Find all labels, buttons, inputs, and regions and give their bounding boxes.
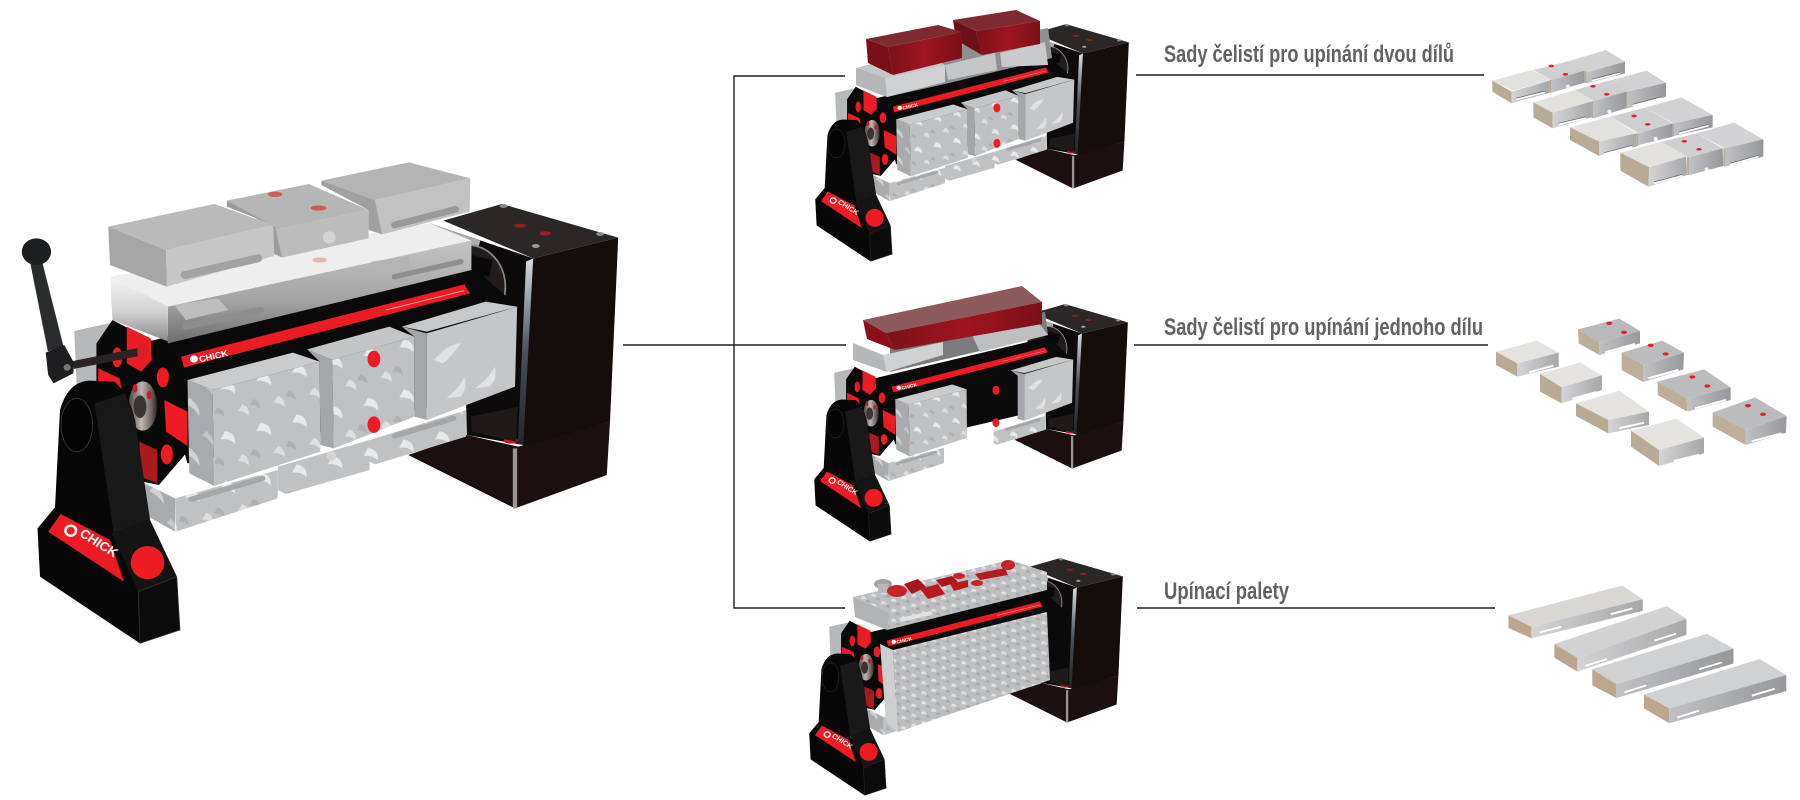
vise option: two-part jaw sets: CHICK <box>836 198 861 217</box>
clamping pallet plates <box>1508 585 1786 723</box>
lifted jaw: right <box>321 162 470 234</box>
vise option: two-part jaw sets: CHICK <box>902 102 919 112</box>
main vise with lifted jaws <box>22 162 618 643</box>
pallet 4 <box>1644 659 1786 723</box>
pallet 2 <box>1554 606 1686 672</box>
vise option: clamping pallets: CHICK <box>830 732 855 751</box>
red clamps and bolts on pallet <box>874 560 1015 599</box>
row 1 <box>1492 50 1625 103</box>
red long workpiece <box>863 286 1042 350</box>
pallet 1 <box>1508 585 1643 638</box>
upper silver jaws <box>853 312 1048 372</box>
heading: two-part jaw sets: Sady čelistí pro upínání dvou dílů <box>1164 41 1454 68</box>
light jaws <box>1496 341 1704 466</box>
top pallet <box>853 560 1047 630</box>
row 2 <box>1533 71 1666 128</box>
main vise with lifted jaws: CHICK <box>198 348 230 364</box>
heading: single-part jaw sets: Sady čelistí pro upínání jednoho dílu <box>1164 314 1483 341</box>
pallet 3 <box>1592 634 1733 698</box>
row 3 <box>1570 97 1713 156</box>
vise option: single-part jaw sets <box>814 286 1128 541</box>
grey jaws with red dots <box>1578 319 1787 445</box>
upper silver jaws <box>856 28 1052 97</box>
row 4 <box>1620 123 1763 187</box>
clamping lever <box>22 238 147 383</box>
red workpieces <box>866 10 1040 75</box>
vise option: single-part jaw sets: CHICK <box>835 478 860 497</box>
vise option: clamping pallets <box>809 558 1123 795</box>
jaw sets: single-part <box>1496 319 1787 466</box>
vise option: single-part jaw sets: CHICK <box>901 382 918 392</box>
lifted jaw: left <box>108 204 274 287</box>
main vise with lifted jaws: CHICK <box>77 526 122 560</box>
connector line: main vise to options <box>623 76 846 608</box>
jaw sets: two-part <box>1492 50 1763 187</box>
vise option: two-part jaw sets <box>815 10 1129 261</box>
front pallet <box>880 612 1050 732</box>
translucent ghost jaws <box>110 223 471 343</box>
vise option: clamping pallets: CHICK <box>896 636 913 646</box>
heading: clamping pallets: Upínací palety <box>1164 578 1289 605</box>
lifted jaw: centre <box>227 184 369 258</box>
